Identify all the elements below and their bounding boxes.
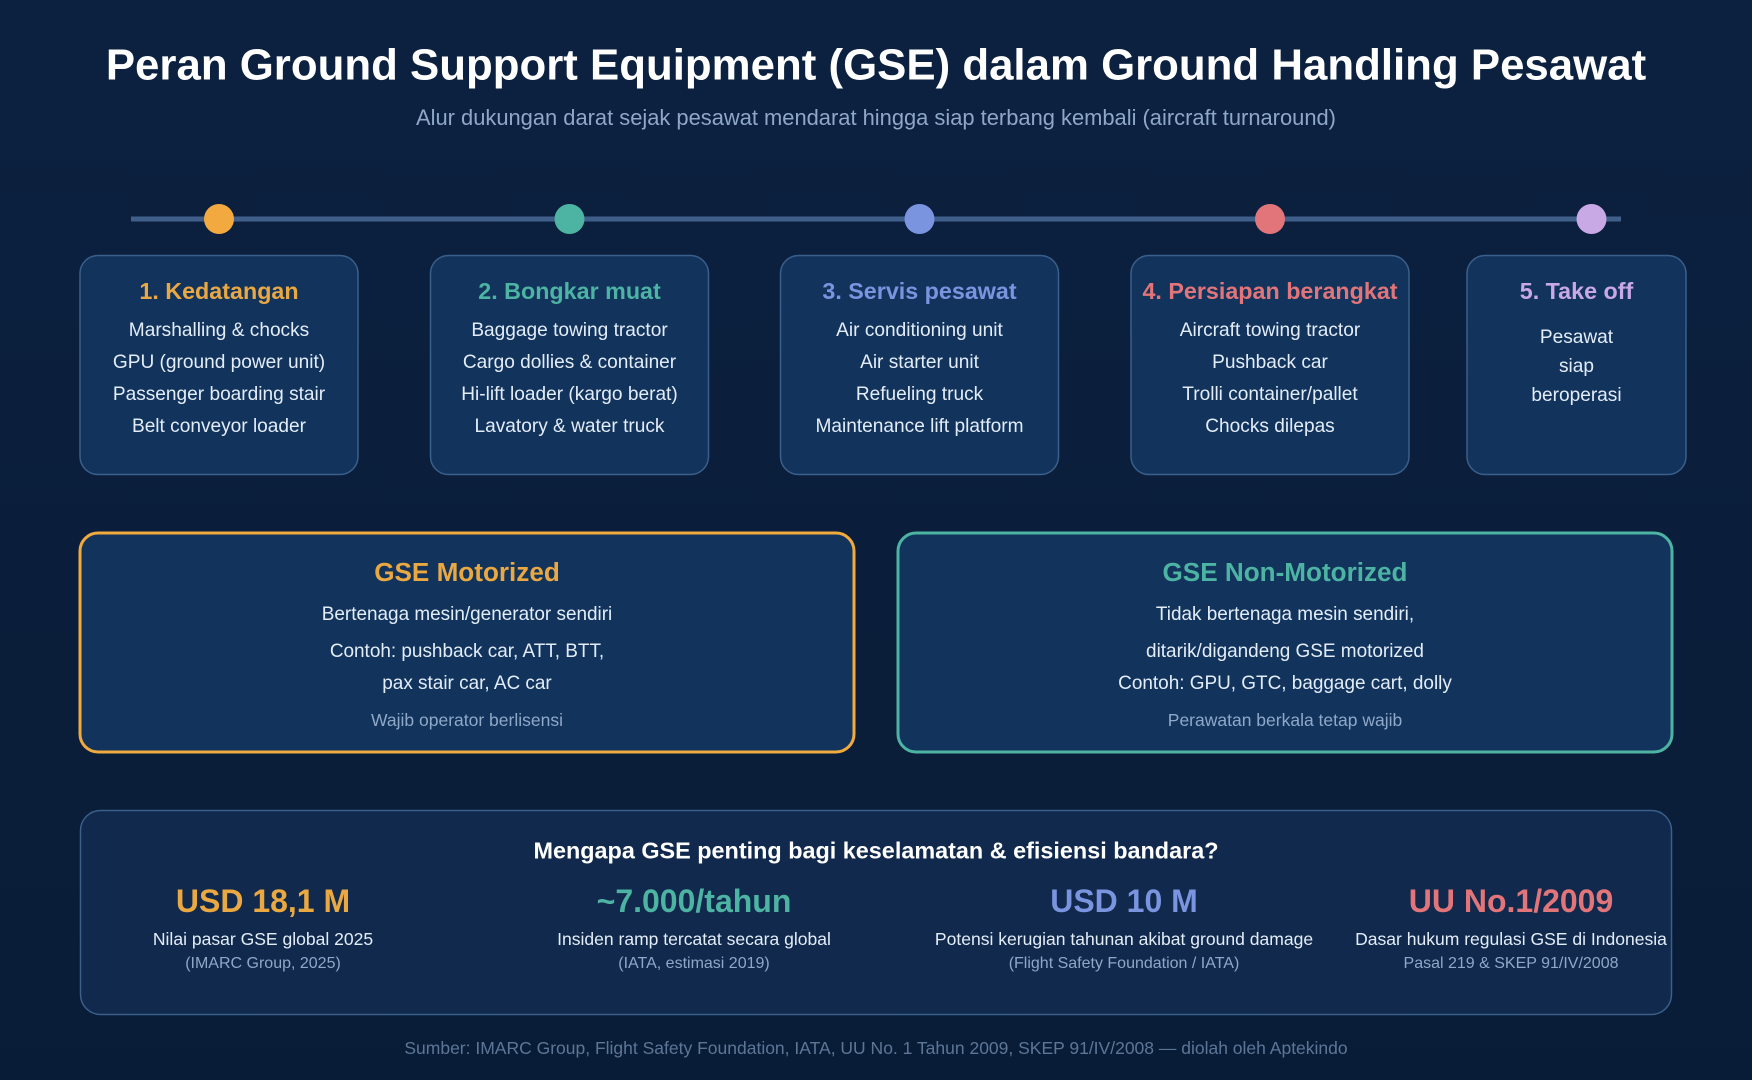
panel heading: Mengapa GSE penting bagi keselamatan & efisiensi bandara? [533,838,1219,864]
panel: step 5 take off: 5. Take off [1520,278,1633,304]
panel: step 5 take off: siap [1559,356,1594,377]
panel: step 2 bongkar muat: Lavatory & water truck [475,416,665,437]
stat: ground damage [935,883,1313,972]
panel: gse non-motorized: Tidak bertenaga mesin sendiri, [1156,604,1414,625]
panel: step 4 persiapan berangkat [1131,256,1409,474]
stat: regulasi: Pasal 219 & SKEP 91/IV/2008 [1404,955,1619,972]
title: Peran Ground Support Equipment (GSE) dalam Ground Handling Pesawat [106,40,1647,90]
stat: pasar global: USD 18,1 M [176,883,350,919]
panel: gse non-motorized: Perawatan berkala tetap wajib [1168,710,1402,730]
stat: insiden ramp: Insiden ramp tercatat secara global [557,929,831,949]
panel: step 3 servis pesawat: Maintenance lift platform [815,416,1024,437]
stat: ground damage: (Flight Safety Foundation / IATA) [1009,955,1239,972]
panel: step 4 persiapan berangkat: Chocks dilepas [1205,416,1335,437]
timeline [131,204,1621,234]
panel: gse motorized: GSE Motorized [374,557,560,587]
panel: gse motorized: pax stair car, AC car [382,673,552,694]
stat: insiden ramp: (IATA, estimasi 2019) [618,955,770,972]
panel: step 3 servis pesawat: 3. Servis pesawat [822,278,1017,304]
stat: insiden ramp: ~7.000/tahun [597,883,791,919]
stat: pasar global [153,883,373,972]
panel: gse non-motorized: ditarik/digandeng GSE motorized [1146,641,1424,662]
panel: step 1 kedatangan [80,256,358,474]
stat: pasar global: Nilai pasar GSE global 2025 [153,929,373,949]
panel: step 1 kedatangan: 1. Kedatangan [139,278,299,304]
stat: insiden ramp [557,883,831,972]
panel: gse motorized: Contoh: pushback car, ATT, BTT, [330,641,604,662]
stat: regulasi: UU No.1/2009 [1409,883,1613,919]
panel: gse non-motorized [898,533,1672,752]
panel: step 2 bongkar muat: 2. Bongkar muat [478,278,661,304]
stat: regulasi: Dasar hukum regulasi GSE di Indonesia [1355,929,1667,949]
panel: step 3 servis pesawat: Refueling truck [856,384,984,405]
panel: step 1 kedatangan: Marshalling & chocks [129,320,309,341]
panel: gse motorized [80,533,854,752]
panel: step 3 servis pesawat: Air conditioning unit [836,320,1004,341]
panel: step 2 bongkar muat: Baggage towing tractor [471,320,668,341]
panel: gse non-motorized: GSE Non-Motorized [1163,557,1407,587]
panel: step 1 kedatangan: Belt conveyor loader [132,416,307,437]
stat: regulasi [1355,883,1667,972]
stat: ground damage: USD 10 M [1050,883,1198,919]
stat: pasar global: (IMARC Group, 2025) [185,955,341,972]
panel: step 1 kedatangan: GPU (ground power unit) [113,352,325,373]
panel: step 3 servis pesawat: Air starter unit [860,352,980,373]
panel: step 4 persiapan berangkat: Trolli container/pallet [1182,384,1358,405]
panel: step 5 take off: Pesawat [1540,327,1614,348]
panel: step 4 persiapan berangkat: Aircraft towing tractor [1180,320,1361,341]
panel: step 2 bongkar muat: Cargo dollies & container [463,352,677,373]
panel: step 5 take off [1467,256,1686,474]
subtitle: Alur dukungan darat sejak pesawat mendarat hingga siap terbang kembali (aircraft turnaround) [416,105,1336,130]
panel: step 5 take off: beroperasi [1531,385,1622,406]
panel: step 4 persiapan berangkat: 4. Persiapan berangkat [1142,278,1398,304]
panel: step 3 servis pesawat [780,256,1058,474]
stat: ground damage: Potensi kerugian tahunan akibat ground damage [935,929,1313,949]
panel: step 2 bongkar muat [430,256,708,474]
panel: gse motorized: Bertenaga mesin/generator sendiri [322,604,612,625]
panel: step 2 bongkar muat: Hi-lift loader (kargo berat) [461,384,678,405]
panel: step 1 kedatangan: Passenger boarding stair [113,384,326,405]
panel: gse non-motorized: Contoh: GPU, GTC, baggage cart, dolly [1118,673,1452,694]
panel: mengapa gse penting [80,810,1672,1014]
panel: step 4 persiapan berangkat: Pushback car [1212,352,1328,373]
panel: gse motorized: Wajib operator berlisensi [371,710,563,730]
source footnote: Sumber: IMARC Group, Flight Safety Foundation, IATA, UU No. 1 Tahun 2009, SKEP 91/IV/2008 — diolah oleh Aptekindo [404,1038,1348,1058]
